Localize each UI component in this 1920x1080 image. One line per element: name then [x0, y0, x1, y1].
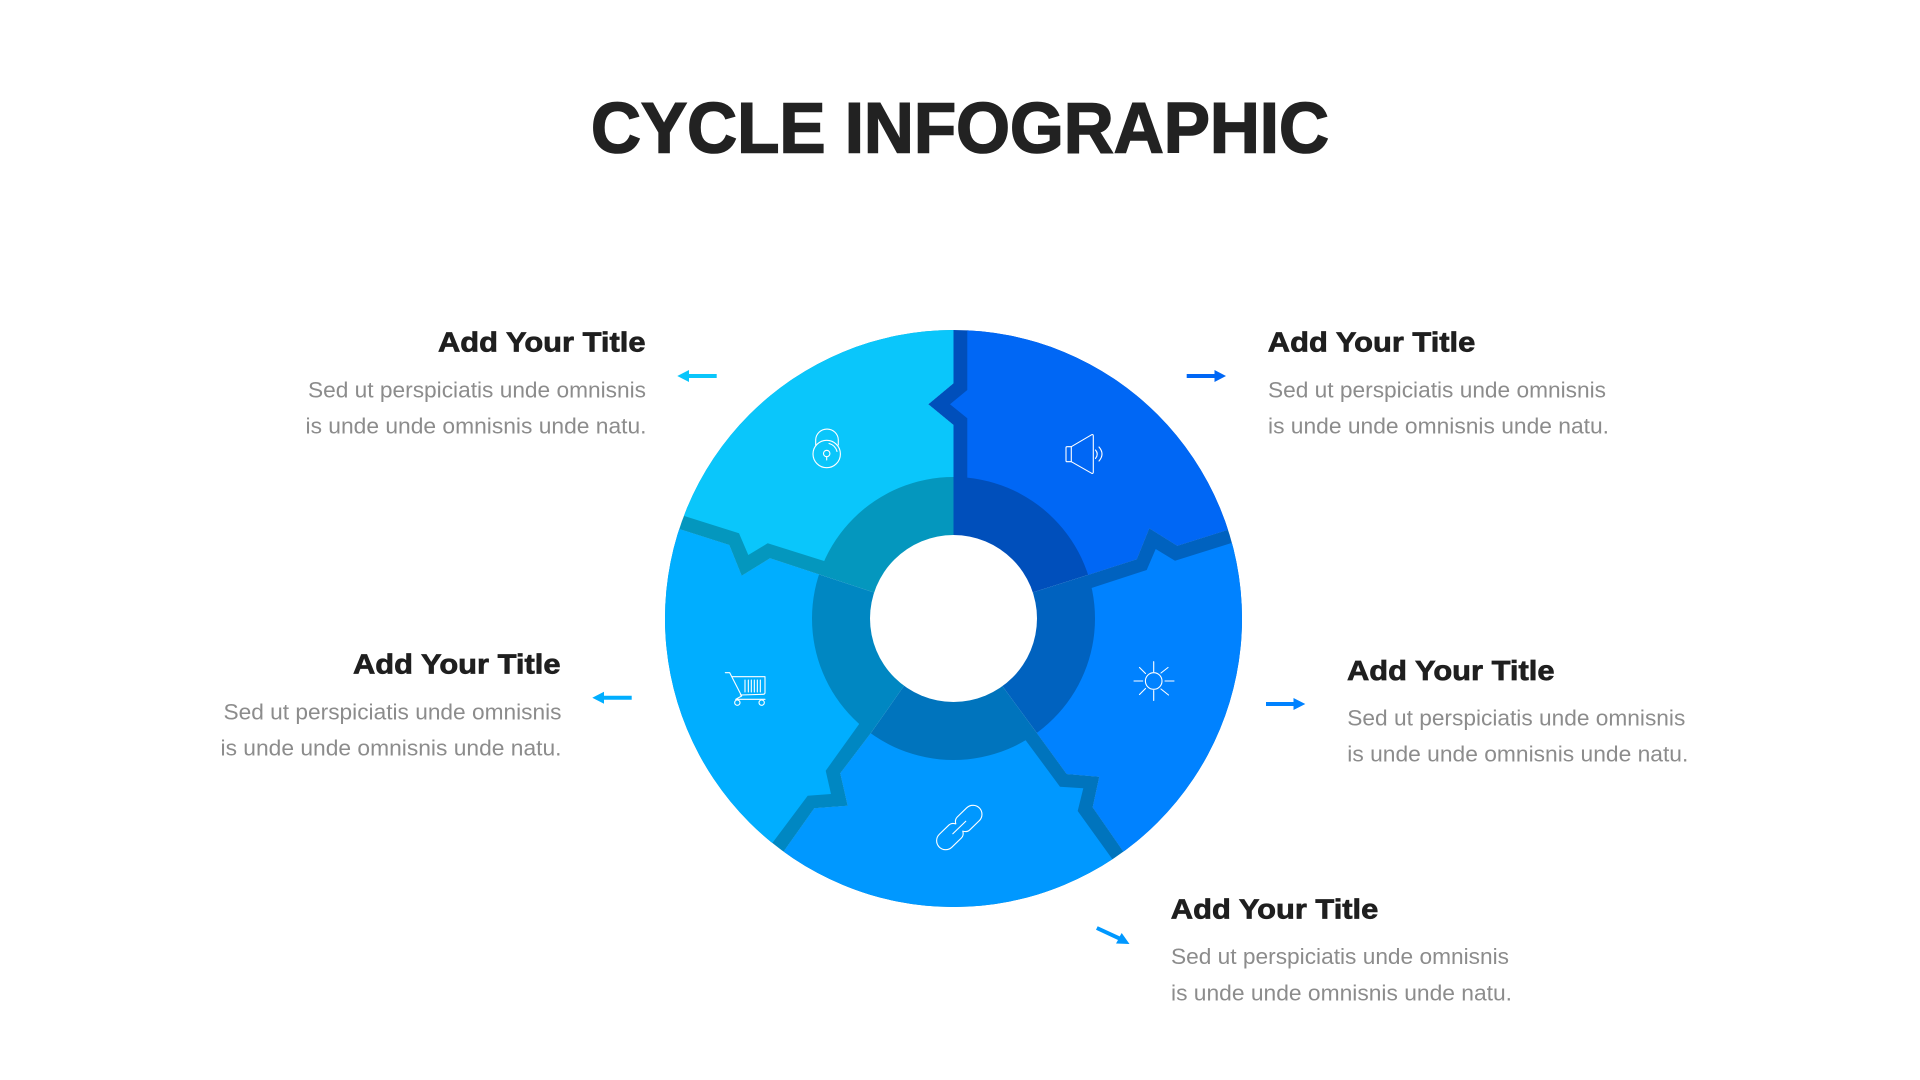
icon: link chain [933, 802, 986, 853]
body: Sed ut perspiciatis unde omnisnis [308, 378, 646, 402]
icon: lock [813, 429, 840, 468]
segment shadows and inner ring [665, 330, 1242, 907]
segments: bright outer pieces [665, 330, 1242, 907]
title: CYCLE INFOGRAPHIC [591, 90, 1329, 168]
body line two: is unde unde omnisnis unde natu. [1171, 980, 1512, 1005]
icon: speaker [1066, 435, 1102, 473]
icon: sun [1134, 662, 1174, 700]
infographic canvas [222, 102, 1686, 1000]
body line two: is unde unde omnisnis unde natu. [1347, 742, 1688, 766]
body: Sed ut perspiciatis unde omnisnis [1268, 378, 1606, 402]
segment: sky blue left [665, 529, 859, 843]
heading: Add Your Title [1347, 655, 1554, 686]
body line two: is unde unde omnisnis unde natu. [1268, 414, 1609, 438]
text block: top left [306, 326, 646, 438]
heading: Add Your Title [353, 648, 560, 680]
body line two: is unde unde omnisnis unde natu. [306, 414, 646, 438]
arrow: bottom [1096, 926, 1130, 944]
text block: top right [1268, 326, 1609, 438]
arrow: top left [677, 370, 717, 382]
cycle wheel [665, 330, 1242, 907]
center hole [870, 535, 1037, 702]
segment: cyan top left [684, 330, 954, 561]
text block: left [220, 648, 562, 760]
heading: Add Your Title [1171, 893, 1378, 924]
segment: royal blue top right [950, 330, 1228, 575]
arrow: right [1266, 698, 1305, 710]
arrow: top right [1187, 370, 1226, 382]
heading: Add Your Title [438, 326, 646, 358]
heading: Add Your Title [1268, 326, 1475, 358]
segment: blue bottom [784, 733, 1112, 907]
text block: bottom right [1171, 893, 1512, 1005]
icon: shopping cart [725, 673, 765, 705]
body: Sed ut perspiciatis unde omnisnis [1171, 944, 1509, 969]
body: Sed ut perspiciatis unde omnisnis [1347, 706, 1685, 730]
body: Sed ut perspiciatis unde omnisnis [224, 700, 562, 724]
body line two: is unde unde omnisnis unde natu. [220, 736, 562, 760]
arrow: left [592, 692, 632, 704]
text block: right [1347, 655, 1688, 766]
segment: blue right [1036, 542, 1242, 852]
